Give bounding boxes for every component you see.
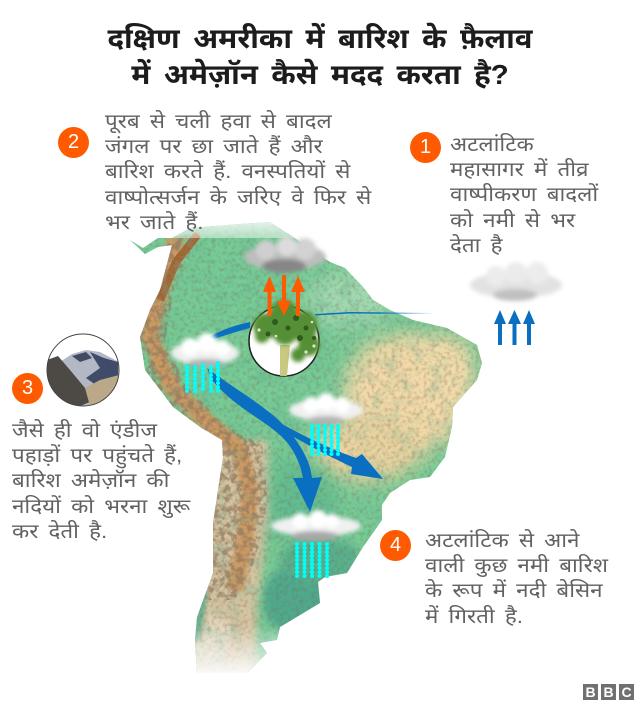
bbc logo [583, 684, 634, 700]
badge 4: 4 [390, 534, 401, 556]
text 3: बारिश अमेज़ॉन की [12, 470, 169, 492]
bbc logo: B [603, 684, 614, 700]
badge 2: 2 [68, 131, 79, 153]
text 1: वाष्पीकरण बादलों [450, 184, 598, 206]
tree in circle [249, 300, 320, 376]
dark cloud over the forest [244, 236, 326, 273]
text 1: अटलांटिक [450, 134, 534, 156]
blue arrow to the south east [268, 416, 383, 479]
title: में अमेज़ॉन कैसे मदद करता है? [131, 59, 509, 90]
text 2: जंगल पर छा जाते हैं और [105, 136, 323, 158]
text 2: पूरब से चली हवा से बादल [105, 111, 332, 133]
cloud over the central basin [289, 393, 363, 424]
cloud over the river basin [271, 510, 361, 541]
text 1: महासागर में तीव्र [450, 159, 589, 181]
text 2: बारिश करते हैं. वनस्पतियों से [105, 161, 350, 183]
rain under central cloud [312, 426, 338, 455]
cloud over the atlantic [470, 262, 562, 301]
wind stream over the amazon [207, 312, 435, 340]
rain under andes cloud [187, 363, 218, 393]
text 3: जैसे ही वो एंडीज [12, 420, 157, 442]
badge 2 [58, 127, 89, 158]
text 4: वाली कुछ नमी बारिश [425, 555, 608, 577]
text 4: के रूप में नदी बेसिन [425, 580, 603, 602]
badge 4 [380, 530, 411, 561]
text 4: अटलांटिक से आने [425, 530, 579, 552]
badge 1 [410, 132, 441, 163]
text 3: कर देती है. [12, 521, 107, 543]
title: दक्षिण अमरीका में बारिश के फ़ैलाव [107, 23, 533, 54]
rain under basin cloud [297, 544, 327, 577]
badge 3 [12, 373, 43, 404]
badge 3: 3 [22, 377, 33, 399]
badge 1: 1 [420, 136, 431, 158]
text 2 [105, 110, 372, 234]
text 1: को नमी से भर [450, 210, 575, 232]
map illustration [46, 222, 562, 673]
title [107, 22, 533, 90]
blue arrow to the south [207, 368, 322, 512]
mountain photo [47, 334, 119, 406]
text 3: पहाड़ों पर पहुंचते हैं, [12, 445, 182, 467]
orange evapotranspiration arrows [263, 275, 305, 316]
text 1 [450, 133, 598, 257]
cloud over the andes [171, 333, 239, 367]
text 3: नदियों को भरना शुरू [12, 496, 190, 518]
text 2: वाष्पोत्सर्जन के जरिए वे फिर से [105, 187, 371, 209]
south america landmass [130, 222, 482, 673]
text 2: भर जाते हैं. [105, 212, 204, 234]
text 4: में गिरती है. [425, 606, 523, 628]
text 3 [12, 419, 190, 543]
bbc logo: C [621, 684, 632, 700]
text 4 [425, 529, 608, 628]
text 1: देता है [450, 235, 503, 257]
blue evaporation arrows [494, 310, 535, 345]
bbc logo: B [585, 684, 596, 700]
